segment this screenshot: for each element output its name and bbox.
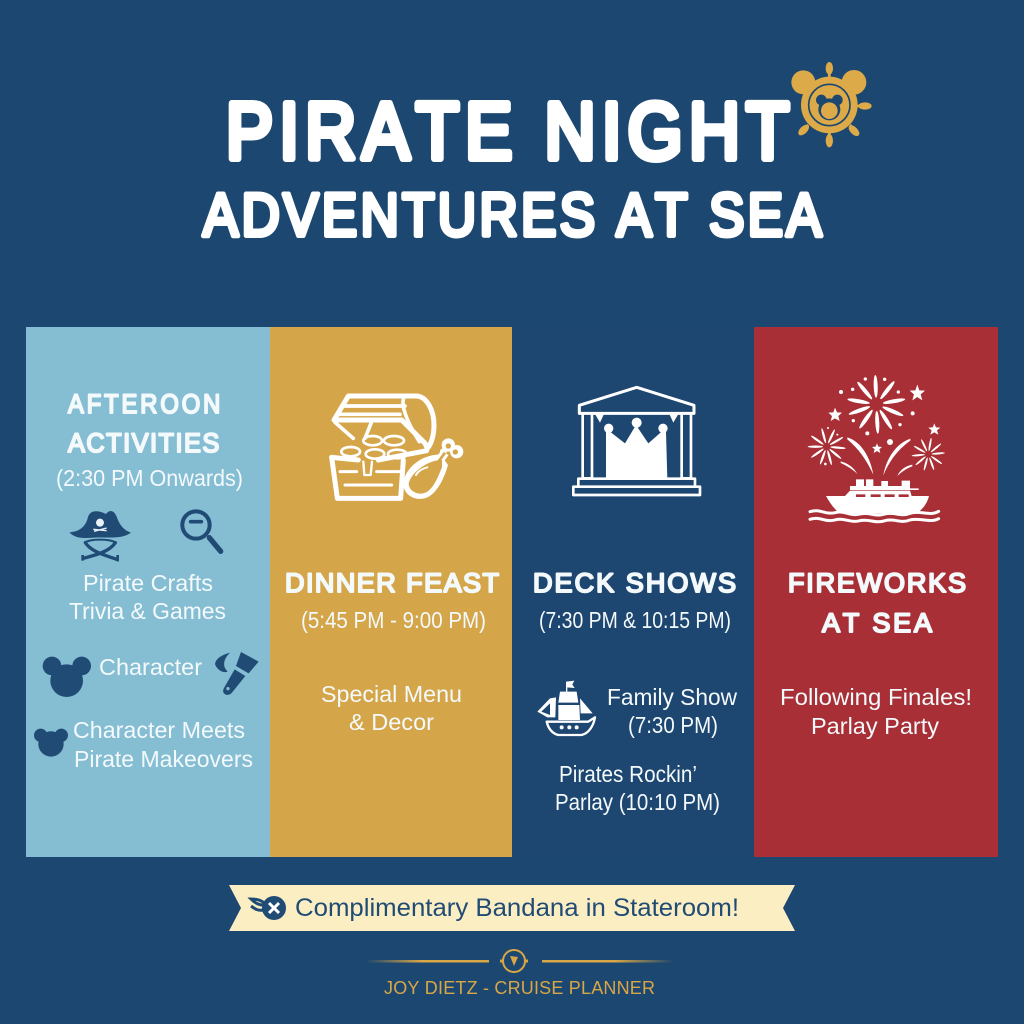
text: special menu: [321, 681, 462, 735]
icon: makeup brush: [215, 652, 259, 695]
text: character: Character: [99, 654, 202, 680]
icon: ship wheel with mouse ears: [791, 62, 872, 147]
text: show times: (7:30 PM & 10:15 PM): [539, 607, 731, 633]
panel: afternoon activities: [26, 327, 270, 857]
heading: fireworks at sea: [788, 568, 966, 638]
text: joy dietz: JOY DIETZ - CRUISE PLANNER: [384, 978, 655, 998]
banner: complimentary bandana: [229, 885, 795, 931]
title: PIRATE NIGHT: [226, 86, 789, 175]
title: ADVENTURES AT SEA: [203, 181, 822, 248]
text: character meets and makeovers: Character Meets: [73, 717, 245, 743]
heading: afternoon activities: [56, 390, 243, 491]
heading: fireworks at sea: FIREWORKS: [788, 568, 966, 598]
panel: dinner feast: [270, 327, 512, 857]
text: crafts and trivia: Pirate Crafts: [83, 570, 213, 596]
panel: fireworks at sea: [754, 327, 998, 857]
text: character meets and makeovers: [73, 717, 253, 772]
icon: bandana skull: [251, 896, 286, 920]
text: finales and parlay party: Following Finales!: [780, 684, 972, 710]
heading: deck shows: DECK SHOWS: [533, 568, 736, 598]
text: character meets and makeovers: Pirate Makeovers: [74, 746, 253, 772]
heading: afternoon activities: AFTEROON: [68, 390, 220, 419]
text: complimentary bandana: Complimentary Bandana in Stateroom!: [295, 894, 739, 922]
panel: deck shows: [512, 327, 754, 857]
icon: small mouse head: [34, 729, 68, 757]
heading: dinner feast: DINNER FEAST: [285, 568, 499, 598]
text: finales and parlay party: Parlay Party: [811, 713, 940, 739]
icon: pirate ship: [537, 681, 595, 735]
icon: footer compass with rules: [366, 950, 674, 972]
icon: magnifying glass: [182, 511, 221, 551]
text: finales and parlay party: [780, 684, 972, 739]
text: dinner time: (5:45 PM - 9:00 PM): [301, 607, 486, 633]
icon: treasure chest and turkey leg: [332, 396, 434, 498]
icon: pirate hat with swords: [69, 511, 131, 561]
heading: afternoon activities: (2:30 PM Onwards): [56, 465, 243, 491]
text: special menu: Special Menu: [321, 681, 462, 707]
icon: mouse head: [43, 657, 91, 697]
heading: afternoon activities: ACTIVITIES: [68, 427, 219, 458]
text: crafts and trivia: [69, 570, 226, 624]
footer: cruise planner: [366, 950, 674, 998]
text: family show: Family Show: [607, 684, 737, 710]
text: pirates rockin parlay: Pirates Rockin’: [559, 761, 697, 787]
text: pirates rockin parlay: [555, 761, 720, 815]
text: family show: [607, 684, 737, 738]
title: [203, 86, 822, 248]
icon: fireworks over cruise ship: [808, 375, 945, 522]
text: crafts and trivia: Trivia & Games: [69, 598, 226, 624]
icon: stage with crown curtain: [573, 387, 700, 495]
text: pirates rockin parlay: Parlay (10:10 PM): [555, 789, 720, 815]
heading: fireworks at sea: AT SEA: [822, 608, 932, 638]
turkey leg: [403, 438, 463, 499]
text: special menu: & Decor: [349, 709, 434, 735]
text: family show: (7:30 PM): [628, 712, 718, 738]
